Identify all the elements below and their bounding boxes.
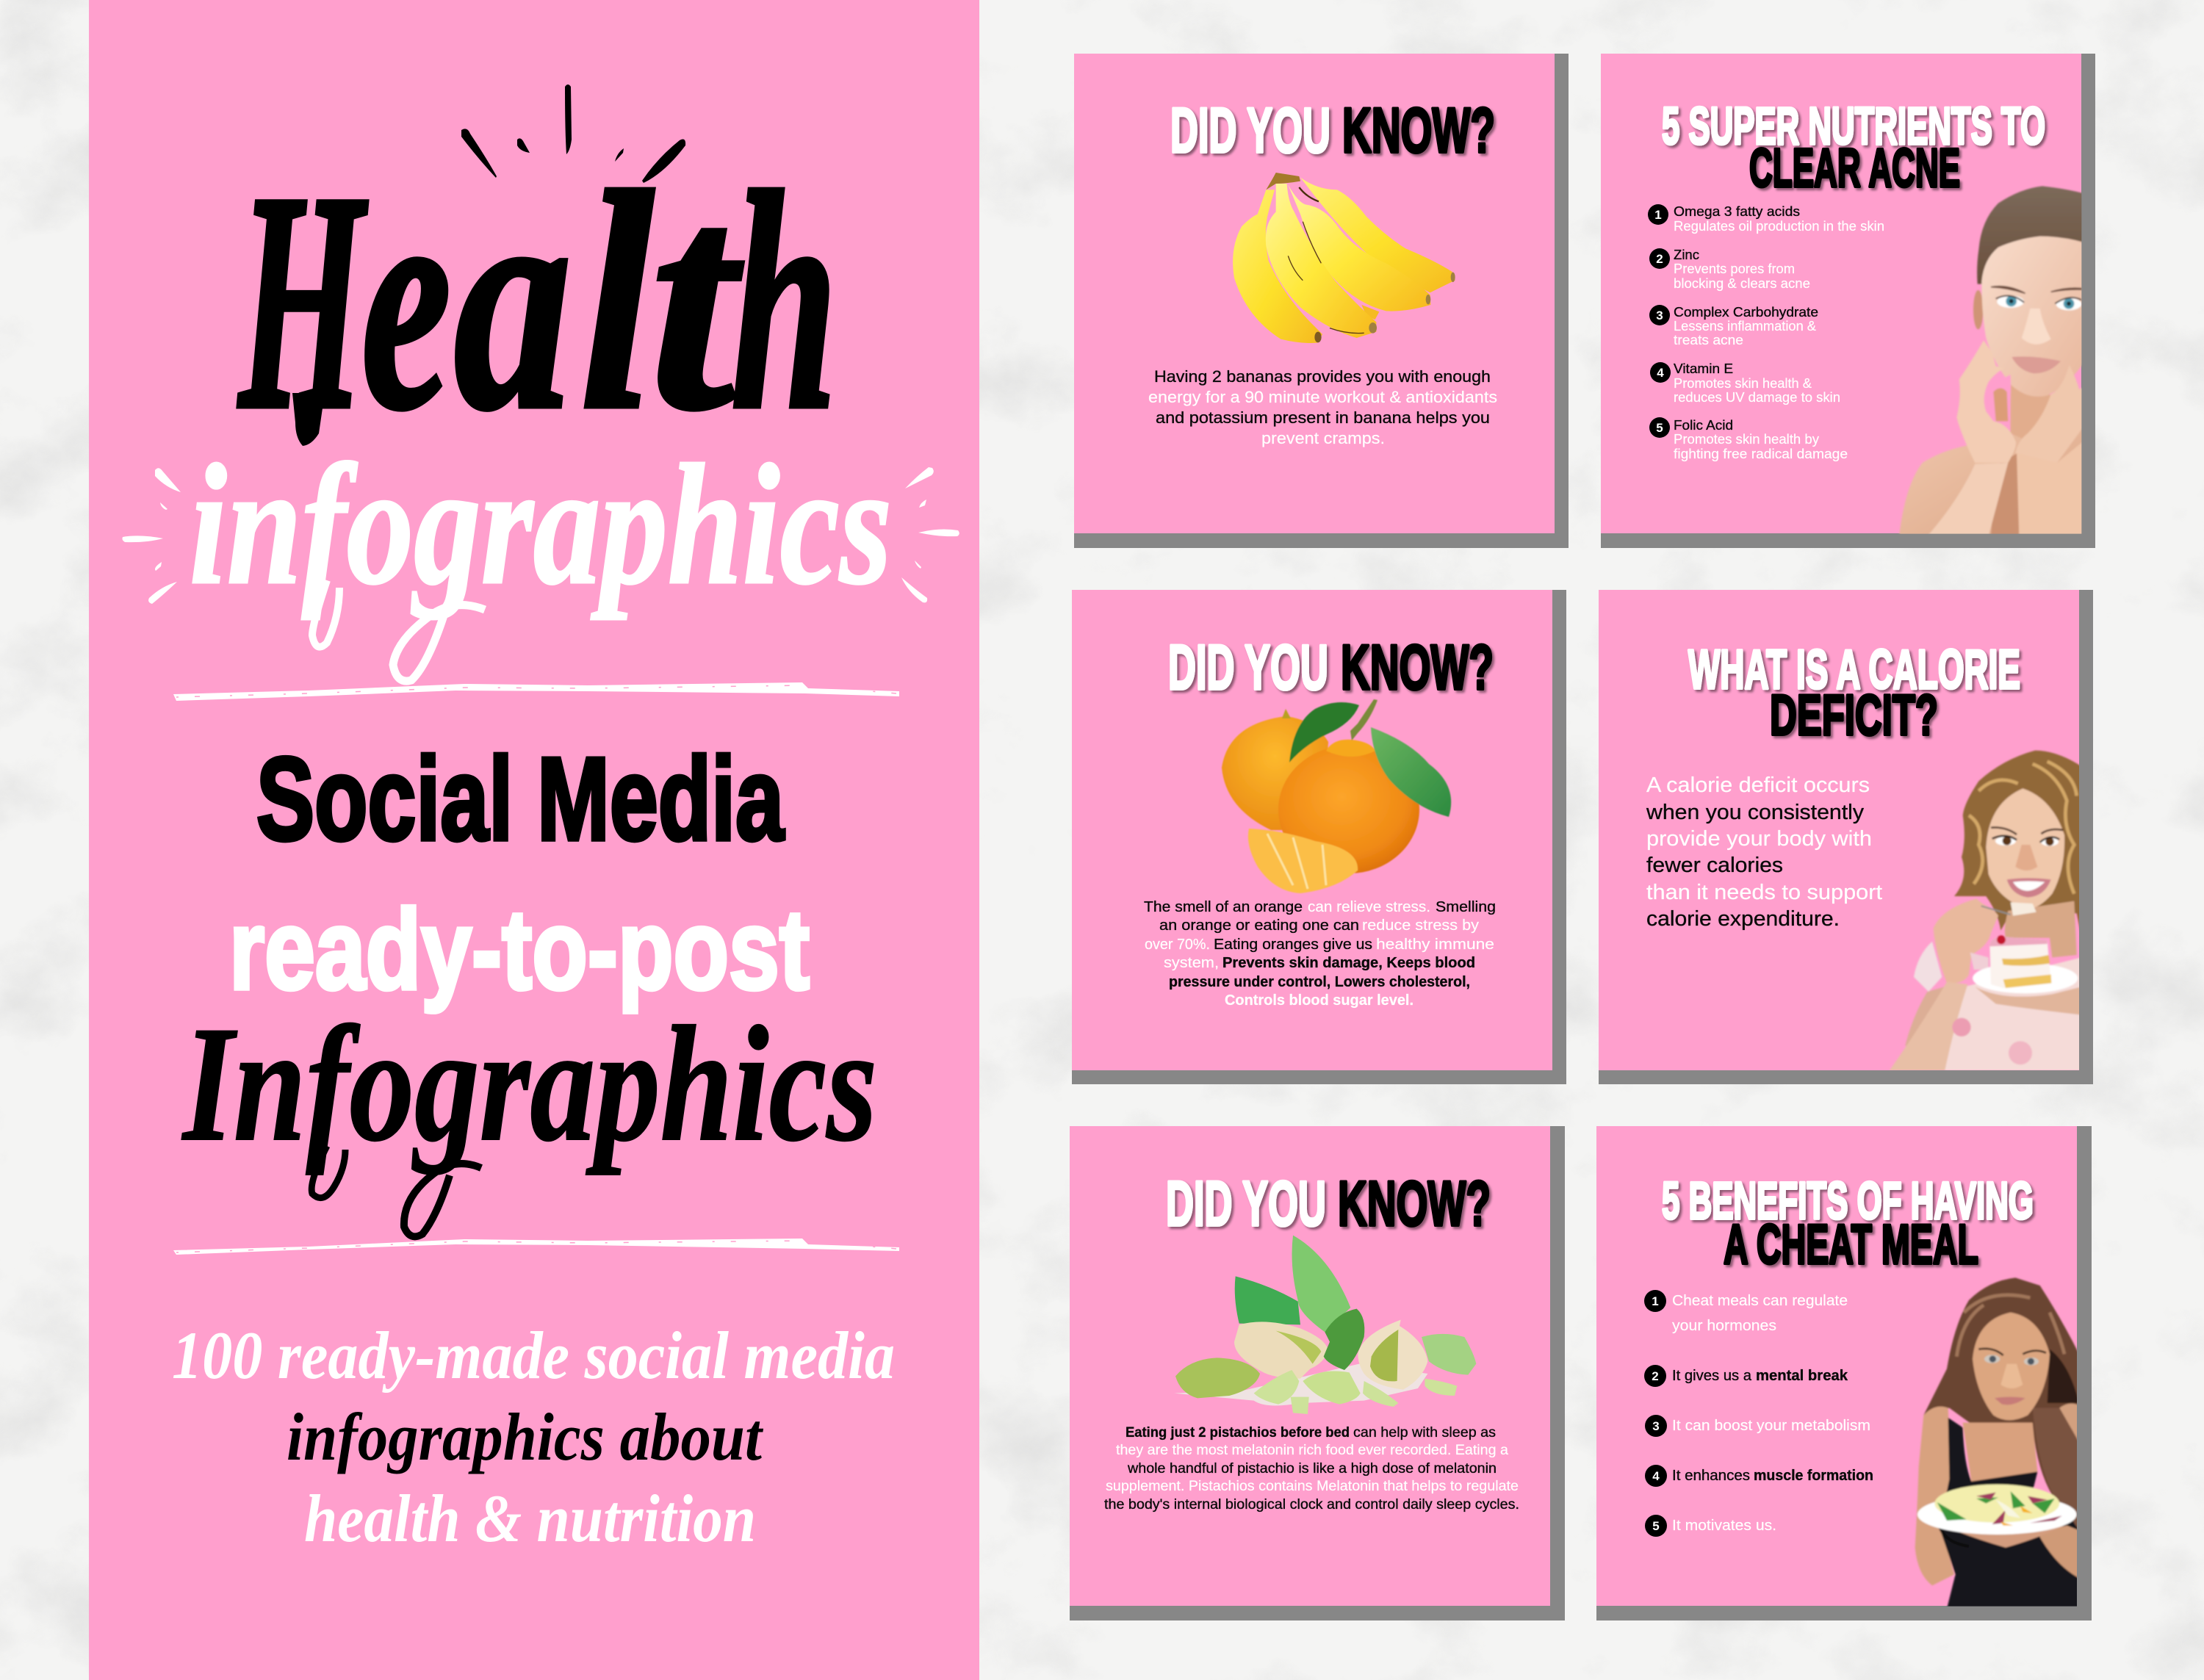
list: benefits: It motivates us. [1672, 1518, 1776, 1534]
text block: banana fact [1148, 367, 1497, 447]
title: super nutrients: CLEAR ACNE [1749, 137, 1960, 198]
list: benefits: It enhances [1672, 1468, 1750, 1484]
icon: black sparkle strokes above Health [461, 84, 685, 183]
icon: bananas [1233, 173, 1455, 343]
list: nutrients: 2 [1656, 252, 1663, 266]
list: nutrients: Zinc [1674, 248, 1699, 262]
list: benefits: mental break [1756, 1368, 1848, 1384]
list: nutrients: Omega 3 fatty acids [1674, 204, 1800, 219]
heading: Health [237, 128, 838, 474]
icon: pistachios [1174, 1236, 1476, 1414]
panel: clear acne card [1601, 54, 2095, 548]
panel: calorie deficit card [1599, 590, 2093, 1084]
panel: did you know pistachio card [1070, 1126, 1565, 1620]
text block: calorie definition: A calorie deficit occurs [1646, 774, 1870, 797]
list: nutrients: Regulates oil production in the skin [1674, 219, 1884, 234]
text block: pistachio fact: the body's internal biological clock and control daily sleep cycles. [1104, 1497, 1519, 1513]
text block: pistachio fact: supplement. Pistachios contains Melatonin that helps to regulate [1106, 1479, 1519, 1494]
illustration: woman with cake [1888, 751, 2081, 1072]
text block: orange fact: system, [1164, 955, 1219, 971]
list: benefits: It gives us a [1672, 1368, 1752, 1384]
heading: Health: t [650, 128, 745, 474]
heading: infographics script [190, 429, 892, 681]
text block: pistachio fact: whole handful of pistachio is like a high dose of melatonin [1127, 1461, 1497, 1477]
heading: ready-to-post: ready-to-post [229, 886, 810, 1013]
panel: cheat meal card [1596, 1126, 2092, 1620]
text block: orange fact: Smelling [1436, 899, 1496, 915]
divider: white chalk stroke [173, 682, 899, 701]
list: nutrients: Folic Acid [1674, 418, 1733, 433]
text block: pistachio fact: Eating just 2 pistachios before bed [1126, 1425, 1350, 1441]
text block: orange fact: an orange or eating one can [1159, 917, 1359, 934]
list: nutrients: Prevents pores from [1674, 262, 1795, 276]
text block: tagline [172, 1318, 895, 1556]
list: benefits [1644, 1290, 1873, 1537]
text block: pistachio fact: can help with sleep as [1353, 1425, 1496, 1441]
title: did you know: KNOW? [1341, 632, 1494, 703]
icon: oranges [1222, 699, 1451, 893]
text block: orange fact: reduce stress by [1362, 917, 1479, 934]
panel: did you know orange card [1072, 590, 1566, 1084]
illustration: woman with salad plate [1915, 1277, 2079, 1609]
heading: Health: H [237, 128, 370, 474]
text block: tagline: infographics about [287, 1399, 763, 1474]
list: nutrients: 4 [1657, 366, 1664, 380]
list: benefits: your hormones [1672, 1318, 1776, 1334]
text block: calorie definition [1646, 774, 1882, 931]
title: cheat meal benefits [1662, 1172, 2034, 1276]
list: nutrients: fighting free radical damage [1674, 447, 1848, 461]
title: cheat meal benefits: A CHEAT MEAL [1724, 1214, 1978, 1276]
text block: orange fact: can relieve stress. [1308, 899, 1430, 915]
text block: orange fact: pressure under control, Lowers cholesterol, [1169, 974, 1470, 990]
list: benefits: 5 [1652, 1519, 1660, 1533]
title: did you know: KNOW? [1338, 1169, 1491, 1239]
heading: Health: a [454, 128, 572, 474]
panel: did you know banana card [1074, 54, 1569, 548]
text block: calorie definition: fewer calories [1646, 854, 1783, 877]
text block: orange fact: healthy immune [1376, 937, 1494, 953]
text block: orange fact: The smell of an orange [1144, 899, 1303, 915]
list: nutrients [1648, 204, 1884, 461]
title: did you know: DID YOU [1170, 95, 1330, 166]
heading: Social Media: Social Media [256, 733, 785, 865]
list: nutrients: Lessens inflammation & [1674, 319, 1816, 334]
list: nutrients: Complex Carbohydrate [1674, 305, 1818, 320]
heading: infographics script: infographics [190, 429, 892, 620]
list: benefits: 4 [1652, 1469, 1660, 1483]
text block: orange fact: over 70%. [1145, 937, 1210, 953]
list: benefits: It can boost your metabolism [1672, 1418, 1870, 1434]
heading: Infographics script [181, 992, 877, 1236]
text block: pistachio fact [1104, 1425, 1519, 1513]
list: benefits: Cheat meals can regulate [1672, 1293, 1848, 1309]
text block: pistachio fact: they are the most melatonin rich food ever recorded. Eating a [1116, 1443, 1508, 1458]
text block: banana fact: and potassium present in banana helps you [1156, 408, 1490, 427]
list: benefits: muscle formation [1754, 1468, 1873, 1484]
title: did you know: DID YOU [1166, 1169, 1326, 1239]
illustration: woman with clear skin [1899, 186, 2084, 536]
list: nutrients: reduces UV damage to skin [1674, 390, 1840, 405]
text block: calorie definition: than it needs to support [1646, 881, 1882, 904]
list: nutrients: 5 [1656, 421, 1663, 435]
title: calorie deficit [1688, 638, 2020, 747]
list: benefits: 2 [1652, 1369, 1659, 1383]
text block: tagline: 100 ready-made social media [172, 1318, 895, 1393]
list: nutrients: Promotes skin health by [1674, 432, 1819, 447]
title: super nutrients [1662, 98, 2045, 198]
text block: calorie definition: provide your body with [1646, 827, 1872, 851]
list: benefits: 3 [1652, 1419, 1660, 1433]
list: benefits: 1 [1652, 1294, 1659, 1308]
heading: Health: l [580, 128, 655, 474]
title: calorie deficit: DEFICIT? [1770, 682, 1938, 747]
text block: calorie definition: when you consistently [1646, 801, 1865, 824]
list: nutrients: 1 [1654, 208, 1662, 222]
text block: banana fact: Having 2 bananas provides you with enough [1154, 367, 1491, 386]
list: nutrients: 3 [1656, 309, 1663, 322]
text block: orange fact: Eating oranges give us [1214, 937, 1372, 953]
icon: white sparkle strokes around infographics [122, 467, 959, 604]
title: did you know: KNOW? [1342, 95, 1495, 166]
list: nutrients: Vitamin E [1674, 361, 1733, 376]
divider: white chalk stroke [173, 1239, 899, 1255]
heading: Health: h [731, 128, 838, 474]
list: nutrients: blocking & clears acne [1674, 276, 1810, 291]
text block: banana fact: energy for a 90 minute workout & antioxidants [1148, 388, 1497, 406]
heading: Health: e [361, 128, 451, 474]
heading: Infographics script: Infographics [181, 992, 877, 1175]
list: nutrients: Promotes skin health & [1674, 376, 1812, 391]
title: did you know: DID YOU [1168, 632, 1328, 703]
text block: banana fact: prevent cramps. [1261, 429, 1385, 447]
text block: orange fact: Controls blood sugar level. [1225, 992, 1413, 1009]
text block: calorie definition: calorie expenditure. [1646, 907, 1840, 931]
text block: tagline: health & nutrition [304, 1481, 756, 1556]
text block: orange fact: Prevents skin damage, Keeps blood [1222, 955, 1475, 971]
panel: cover title column [89, 0, 979, 1680]
text block: orange fact [1144, 899, 1496, 1009]
list: nutrients: treats acne [1674, 333, 1743, 347]
